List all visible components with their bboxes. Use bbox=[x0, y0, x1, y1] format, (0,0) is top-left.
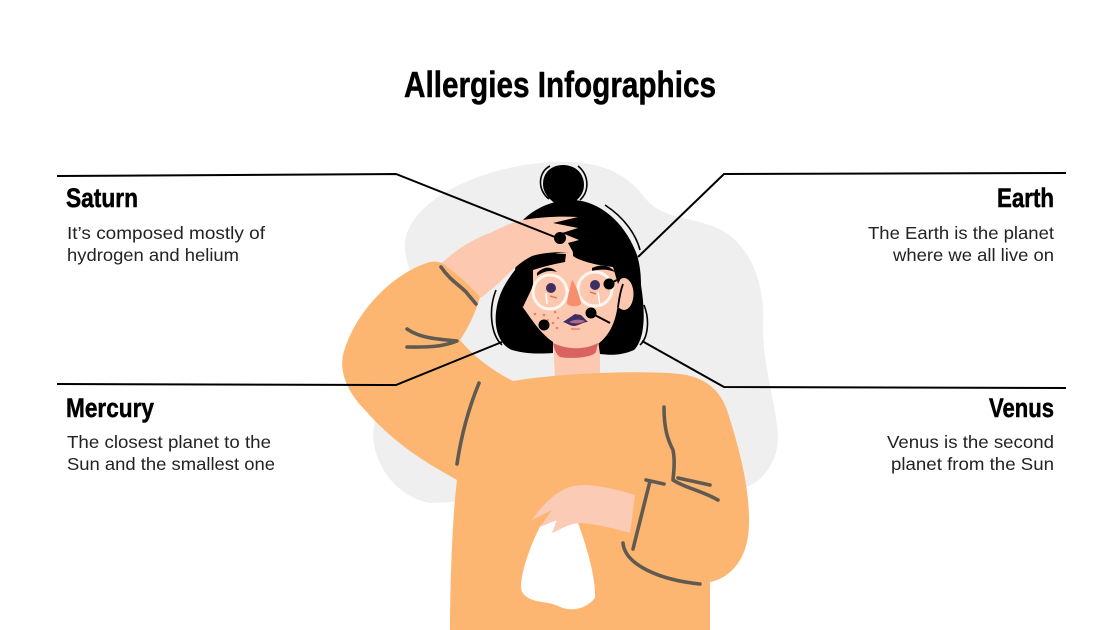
connector: Saturn bbox=[57, 174, 565, 243]
tissue bbox=[521, 520, 595, 609]
title: Allergies Infographics bbox=[404, 64, 716, 105]
text: Mercury bbox=[66, 393, 275, 474]
freckles bbox=[534, 311, 559, 329]
text: Mercury: Sun and the smallest one bbox=[67, 454, 275, 474]
text: Earth bbox=[868, 183, 1054, 265]
eyes bbox=[546, 283, 556, 293]
ear bbox=[614, 278, 634, 310]
text: Mercury: Mercury bbox=[66, 393, 154, 423]
text: Venus: Venus bbox=[989, 393, 1054, 423]
text: Venus bbox=[887, 393, 1054, 474]
glasses bbox=[533, 272, 612, 309]
mouth bbox=[563, 314, 588, 326]
background blob bbox=[373, 162, 778, 503]
sweater fold lines bbox=[407, 267, 718, 584]
text: Saturn: hydrogen and helium bbox=[67, 245, 239, 265]
hair back and bun bbox=[491, 165, 647, 355]
text: Venus: Venus is the second bbox=[887, 432, 1054, 452]
neck bbox=[553, 340, 600, 378]
nose bbox=[567, 280, 581, 306]
sweater bbox=[342, 262, 749, 630]
text: Mercury: The closest planet to the bbox=[67, 432, 271, 452]
eyebrows bbox=[537, 266, 615, 276]
face bbox=[515, 215, 638, 348]
text: Earth: Earth bbox=[997, 183, 1054, 213]
text: Saturn: Saturn bbox=[66, 183, 138, 213]
connector: Mercury bbox=[57, 342, 502, 385]
text: Earth: The Earth is the planet bbox=[868, 223, 1054, 243]
text: Saturn: It’s composed mostly of bbox=[67, 223, 265, 243]
allergy markers bbox=[538, 278, 617, 330]
illustration: woman with allergies bbox=[342, 165, 749, 630]
text: Earth: where we all live on bbox=[892, 245, 1054, 265]
text: Saturn bbox=[66, 183, 265, 265]
lower hand bbox=[532, 485, 635, 533]
connector: Earth bbox=[638, 173, 1066, 257]
red scarf bbox=[553, 343, 598, 358]
connector: Venus bbox=[642, 341, 1066, 388]
hair fringe bbox=[515, 215, 638, 307]
raised forearm and hand bbox=[442, 217, 579, 298]
text: Venus: planet from the Sun bbox=[891, 454, 1054, 474]
